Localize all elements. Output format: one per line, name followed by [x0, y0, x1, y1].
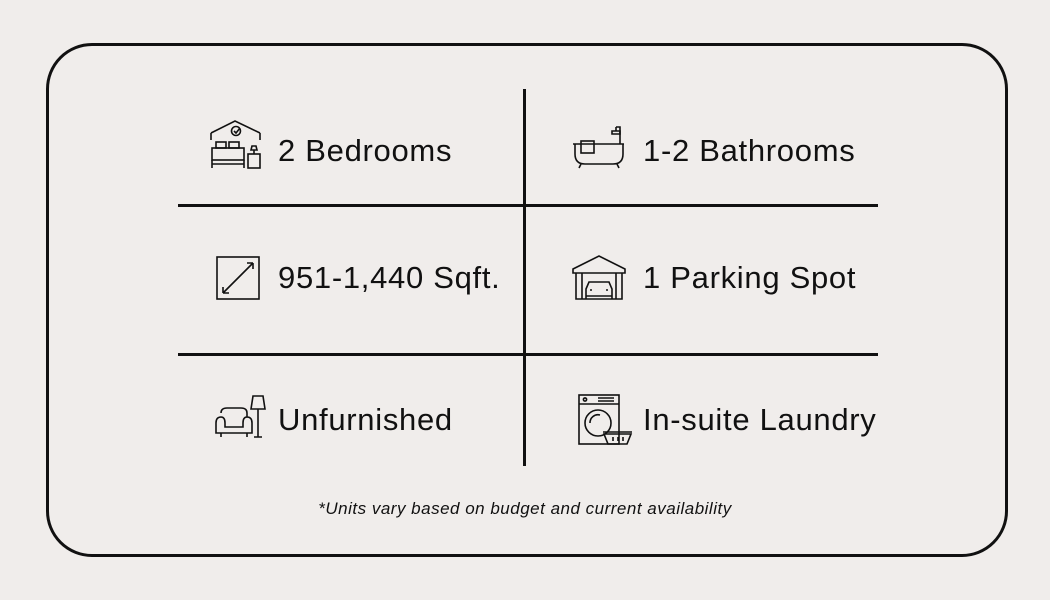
text: unfurnished: Unfurnished: [278, 402, 453, 437]
text: laundry: In-suite Laundry: [643, 402, 876, 437]
icon: area: [216, 256, 260, 300]
icon: bedroom: [210, 120, 261, 169]
text: bathrooms: 1-2 Bathrooms: [643, 133, 855, 168]
icon: armchair and lamp: [215, 395, 266, 438]
card border: [46, 43, 1008, 557]
footnote: *Units vary based on budget and current availability: [318, 499, 732, 518]
grid lines: [523, 89, 526, 466]
text: parking: 1 Parking Spot: [643, 260, 856, 295]
text: area: 951-1,440 Sqft.: [278, 260, 500, 295]
icon: bathtub: [573, 126, 624, 168]
icon: garage: [572, 255, 626, 300]
text: bedrooms: 2 Bedrooms: [278, 133, 452, 168]
icon: laundry: [578, 394, 632, 445]
